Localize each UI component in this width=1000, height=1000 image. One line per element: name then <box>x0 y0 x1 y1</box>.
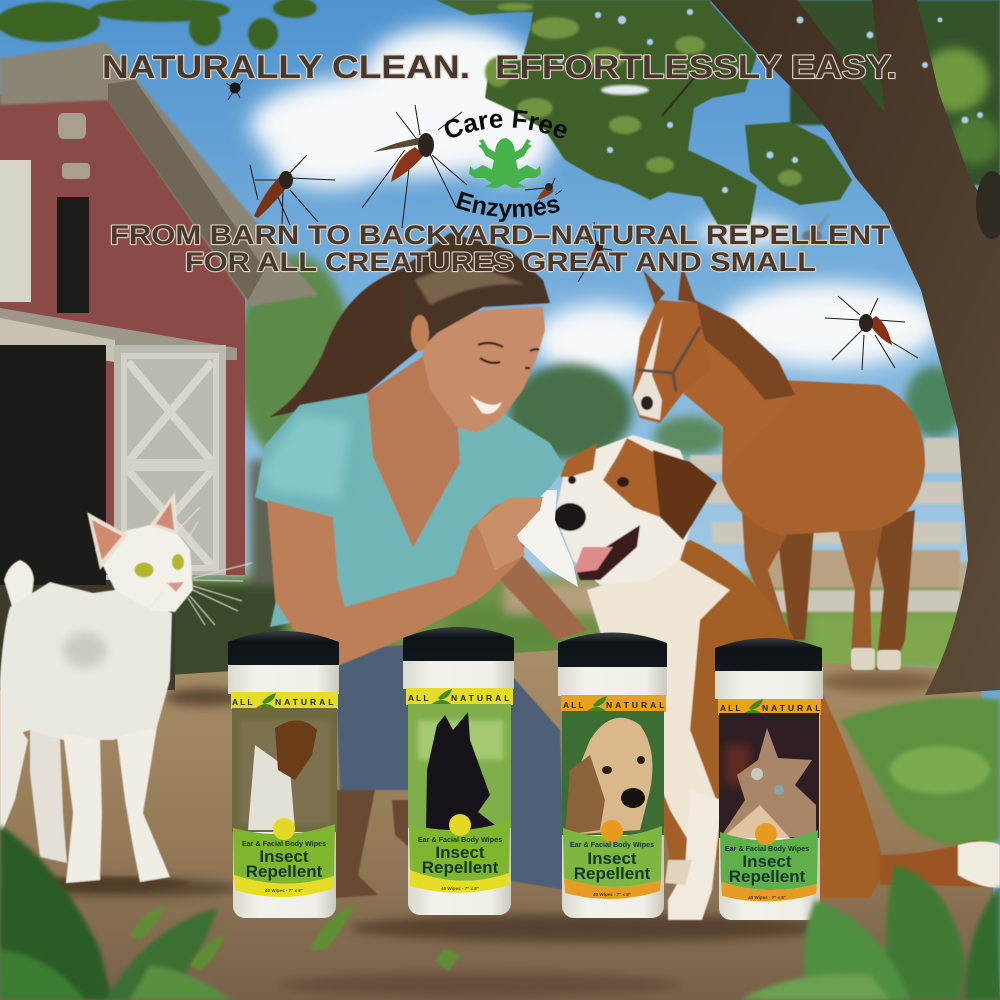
can 1 count: 40 Wipes - 7" x 8" <box>265 888 303 893</box>
ground soil <box>0 650 1000 1000</box>
cat far rear leg <box>0 700 28 830</box>
mosquito left <box>250 155 335 225</box>
cat body <box>0 582 172 740</box>
can 4 lid <box>715 638 822 671</box>
woman ear <box>411 315 429 351</box>
barn shutter <box>0 160 31 302</box>
cat eyes <box>134 554 184 578</box>
ground texture and shadows <box>20 672 940 997</box>
barn roof <box>0 42 318 306</box>
horse bridle <box>638 327 700 392</box>
branch <box>662 78 694 116</box>
can 2 photo <box>408 704 511 830</box>
can 2 label text: ALL <box>408 693 431 703</box>
woman neck and chest <box>367 355 460 548</box>
tree knot <box>976 171 1000 239</box>
tree foliage <box>435 0 983 225</box>
barn <box>0 42 318 585</box>
grass patch right <box>840 698 1000 847</box>
dog front leg <box>668 790 722 920</box>
can 4 sprout <box>743 699 763 714</box>
cloud gap in foliage <box>601 85 649 95</box>
can 1 green panel <box>233 824 335 884</box>
cleaning wipe <box>508 490 578 587</box>
can 1 badge <box>273 818 295 840</box>
ground sprouts <box>130 905 460 972</box>
can 2 lid <box>403 627 514 661</box>
horse hooves <box>851 648 901 670</box>
can 3 count: 40 Wipes - 7" x 8" <box>593 892 631 897</box>
mosquito small top <box>226 80 243 100</box>
can 2 sprout <box>432 689 452 704</box>
can 3 title line two: Repellent <box>574 864 651 883</box>
barn lintel <box>0 318 115 362</box>
can 3 lid <box>558 632 667 667</box>
foliage sky dots <box>557 9 983 193</box>
can 1 yellow footer <box>234 875 334 897</box>
logo frog icon <box>469 138 541 188</box>
barn lights <box>58 113 90 179</box>
can 1 title: Insect <box>259 847 309 866</box>
can 1 label text: NATURAL <box>275 697 336 707</box>
subheading line one: FROM BARN TO BACKYARD–NATURAL REPELLENT <box>110 220 891 250</box>
woman sleeve highlight <box>262 415 350 500</box>
top left leaves <box>0 0 317 50</box>
can 4 shell <box>719 695 820 920</box>
can 1 photo <box>232 708 337 832</box>
tree foliage behind trunk <box>790 0 1000 185</box>
mosquitoes <box>226 80 918 370</box>
horse near legs <box>742 510 885 670</box>
right fence posts <box>960 453 1000 612</box>
can 1: goat <box>228 631 339 918</box>
woman boots <box>335 790 412 898</box>
horse neck <box>683 303 790 470</box>
can 4 label text: ALL <box>720 703 743 713</box>
can 4: cat <box>715 638 823 920</box>
dog tail <box>880 840 1000 888</box>
barn floor shadow <box>0 580 175 690</box>
woman left arm <box>267 497 545 665</box>
can 3 label text: ALL <box>563 700 586 710</box>
can 3 badge <box>601 820 623 842</box>
can 4 orange band <box>718 699 821 715</box>
can 1 collar <box>228 660 339 694</box>
dog head <box>555 435 700 585</box>
can 1 shell <box>233 690 336 918</box>
woman <box>255 233 587 898</box>
woman far arm <box>500 553 587 640</box>
cat inner ears <box>92 502 174 560</box>
woman smile <box>470 395 502 414</box>
cat ears <box>87 492 178 570</box>
logo: Care Free Enzymes <box>444 110 566 222</box>
can 2 count: 40 Wipes - 7" x 8" <box>441 886 479 891</box>
can 2 collar <box>403 655 514 689</box>
can 4 label text: NATURAL <box>762 703 823 713</box>
can 1 sprout <box>256 693 276 708</box>
foreground leaves right <box>740 865 1000 1000</box>
mosquito near logo <box>525 178 562 208</box>
can 3 collar <box>558 662 667 696</box>
foreground leaves left <box>0 825 232 1000</box>
barn dark opening <box>0 345 106 585</box>
tree trunk <box>710 0 1000 695</box>
cat rear leg <box>30 730 67 863</box>
can 4 title line two: Repellent <box>729 867 806 886</box>
dog tail tip <box>958 842 1000 888</box>
woman shirt <box>255 393 565 627</box>
woman jeans <box>335 640 565 890</box>
can 1 title line two: Repellent <box>246 862 323 881</box>
background: sky <box>0 0 1000 690</box>
barn wall <box>0 85 245 575</box>
foliage highlights <box>485 3 802 186</box>
cat body shadow <box>63 632 107 668</box>
headline <box>102 49 897 85</box>
can 2 title: Insect <box>435 843 485 862</box>
horse mane <box>695 300 795 400</box>
headline: NATURALLY CLEAN. <box>102 49 470 85</box>
cat tail <box>4 560 34 610</box>
barn door <box>114 345 226 575</box>
cat shadow <box>30 877 190 891</box>
dog second paw <box>665 860 692 885</box>
background trees <box>237 255 965 465</box>
woman face <box>423 307 545 433</box>
can 1 label text: ALL <box>232 697 255 707</box>
can 3: dog <box>558 632 667 918</box>
can 3 photo <box>562 711 664 835</box>
woman eyes and brows <box>478 343 539 368</box>
dog <box>554 435 1000 920</box>
foliage main mass <box>485 0 757 225</box>
horse blaze <box>633 315 663 420</box>
dog eyes <box>568 476 629 487</box>
woman ponytail <box>270 268 430 417</box>
can 1 lid <box>228 631 339 665</box>
can 4 collar <box>715 667 823 699</box>
can 4 title: Insect <box>742 852 792 871</box>
cat <box>0 492 252 891</box>
horse <box>632 265 925 670</box>
foliage right cluster <box>745 122 852 205</box>
can 2 green panel <box>409 820 510 881</box>
can 4 photo <box>719 713 819 838</box>
dog tongue <box>573 547 613 573</box>
mosquito center <box>578 222 616 282</box>
headline: EFFORTLESSLY EASY. <box>495 49 897 85</box>
barn soffit shadow <box>108 80 265 300</box>
can 2 label text: NATURAL <box>451 693 512 703</box>
cat nose <box>167 582 184 592</box>
barn beam <box>0 308 237 360</box>
can 4 count: 40 Wipes - 7" x 8" <box>748 895 786 900</box>
clouds <box>250 25 940 376</box>
horse nose <box>641 396 653 410</box>
dog mouth <box>575 525 640 580</box>
can 3 orange band <box>561 695 666 712</box>
can 4 subtitle: Ear & Facial Body Wipes <box>725 844 809 853</box>
mosquito large <box>362 105 467 228</box>
can 2 title line two: Repellent <box>422 858 499 877</box>
woman's fingers on wipe <box>477 497 543 570</box>
horse ears <box>643 265 696 305</box>
cat front legs <box>63 727 170 883</box>
dog body <box>610 540 885 898</box>
can 4 green panel <box>720 830 818 890</box>
can 2: horse <box>403 627 514 915</box>
mosquito right <box>825 296 918 370</box>
can 3 subtitle: Ear & Facial Body Wipes <box>570 840 654 849</box>
cat whiskers <box>118 507 252 645</box>
logo bottom text: Enzymes <box>456 191 560 222</box>
cat head <box>95 525 193 612</box>
barn window <box>57 197 89 313</box>
dog brown face right <box>603 438 663 517</box>
woman hair <box>400 233 550 345</box>
woman hair highlight <box>415 269 525 305</box>
can 2 shell <box>408 685 511 915</box>
can 3 label text: NATURAL <box>606 700 667 710</box>
can 3 title: Insect <box>587 849 637 868</box>
dog chest <box>587 560 730 860</box>
can 3 sprout <box>587 696 607 711</box>
can 3 orange footer <box>564 878 661 899</box>
can 3 shell <box>562 692 664 918</box>
subheading line two: FOR ALL CREATURES GREAT AND SMALL <box>185 247 816 277</box>
dog brown face left <box>560 443 597 477</box>
grass strip behind the yard <box>165 460 1000 682</box>
dog ear <box>653 450 717 540</box>
can 1 subtitle: Ear & Facial Body Wipes <box>242 839 326 848</box>
wooden fence <box>690 438 1000 612</box>
can 4 orange footer <box>721 882 817 902</box>
can 1 yellow band <box>231 692 338 709</box>
can 4 badge <box>755 823 777 845</box>
logo top text: Care Free <box>444 110 566 138</box>
horse head <box>632 300 710 423</box>
mosquito faint blurred <box>800 212 830 248</box>
dog nose <box>554 503 586 531</box>
horse far legs <box>775 510 915 670</box>
can 2 badge <box>449 814 471 836</box>
can 3 green panel <box>563 826 662 887</box>
can 2 yellow band <box>406 688 513 705</box>
can 2 subtitle: Ear & Facial Body Wipes <box>418 835 502 844</box>
can 2 yellow footer <box>410 870 509 893</box>
foliage top strip <box>435 0 712 15</box>
horse body <box>722 380 925 535</box>
